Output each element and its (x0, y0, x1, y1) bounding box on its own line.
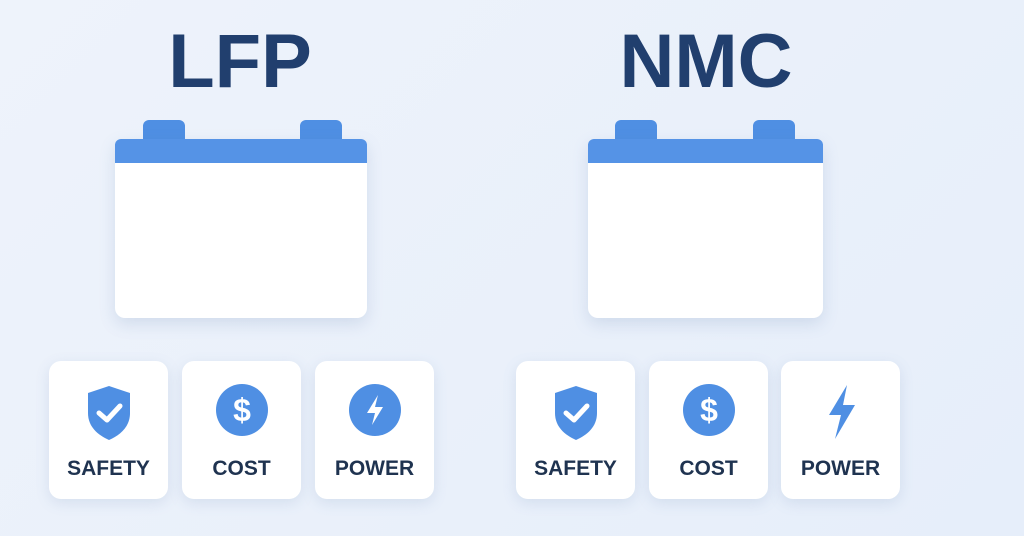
icon: dollar (216, 384, 268, 436)
card: NMC power (781, 361, 900, 499)
icon: dollar: $ (233, 392, 251, 428)
card: LFP cost (182, 361, 301, 499)
card: LFP cost: COST (212, 457, 271, 480)
icon: bolt (829, 385, 855, 439)
battery: NMC (584, 120, 827, 328)
title: NMC: NMC (619, 19, 793, 104)
card: LFP power: POWER (335, 457, 414, 480)
card: NMC safety: SAFETY (534, 457, 617, 480)
card: NMC cost (649, 361, 768, 499)
battery: LFP (110, 120, 371, 328)
title: LFP: LFP (168, 19, 312, 104)
card: LFP safety (49, 361, 168, 499)
card: NMC safety (516, 361, 635, 499)
card: LFP safety: SAFETY (67, 457, 150, 480)
icon: dollar (683, 384, 735, 436)
card: LFP power (315, 361, 434, 499)
icon: shield (555, 386, 597, 440)
icon: shield (88, 386, 130, 440)
card: NMC cost: COST (679, 457, 738, 480)
card: NMC power: POWER (801, 457, 880, 480)
icon: bolt circle (349, 384, 401, 436)
icon: dollar: $ (700, 392, 718, 428)
